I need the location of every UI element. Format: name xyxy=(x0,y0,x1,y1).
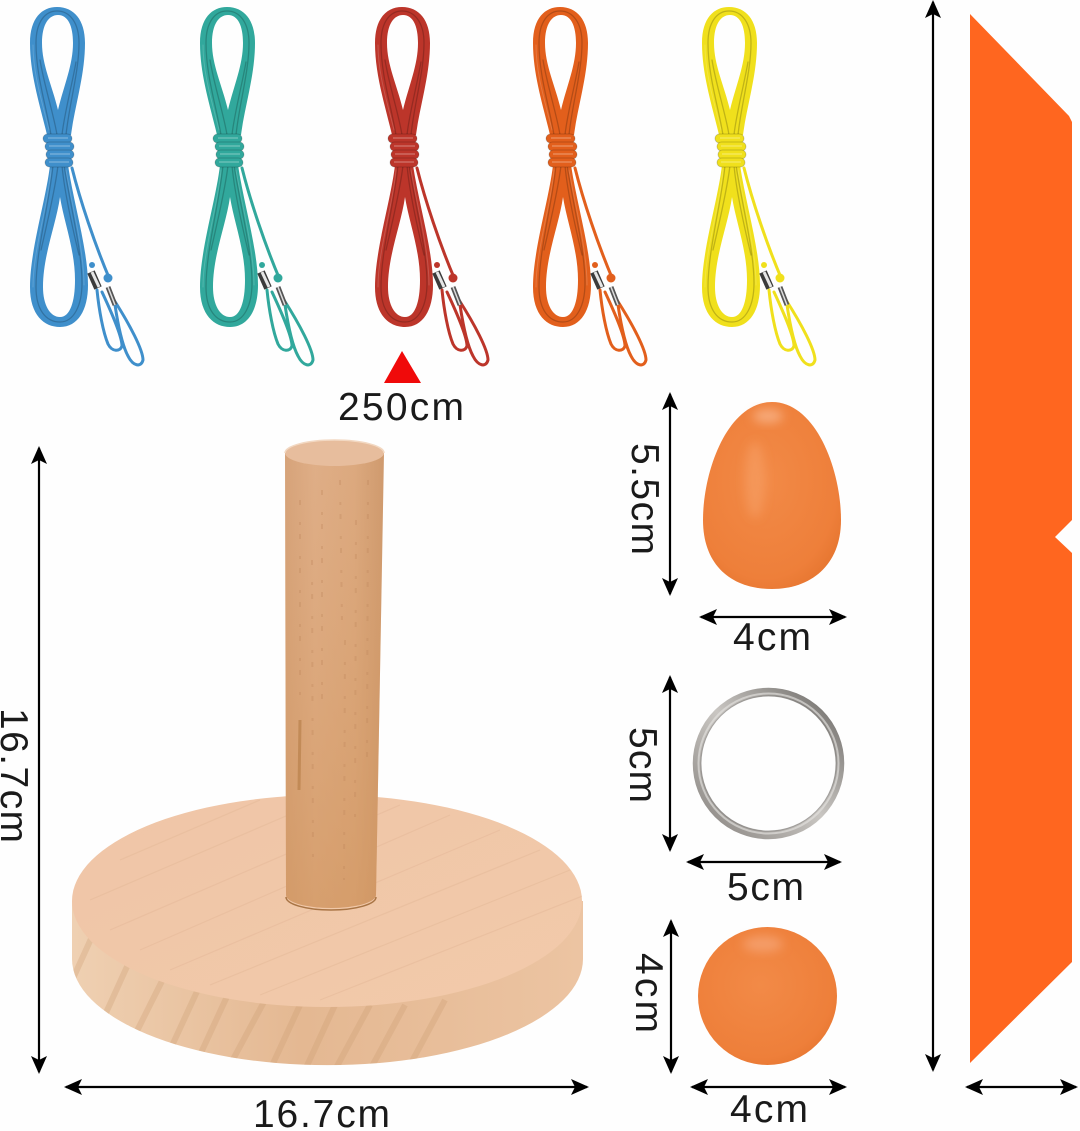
orange paper strip xyxy=(970,14,1072,1063)
arrow: ball width xyxy=(692,1086,845,1088)
arrow: strip height xyxy=(932,2,934,1070)
arrow: strip width xyxy=(967,1086,1076,1088)
ball xyxy=(698,927,837,1065)
icon: red triangle marker xyxy=(384,351,421,383)
arrow: ring width xyxy=(688,861,840,863)
egg height label: 5.5cm xyxy=(623,443,666,555)
egg xyxy=(703,402,841,589)
stand post xyxy=(285,440,384,910)
arrow: stand width xyxy=(66,1086,587,1088)
metal ring xyxy=(697,692,840,835)
ball width label: 4cm xyxy=(730,1088,808,1131)
ball height label: 4cm xyxy=(627,953,670,1033)
arrow: ball height xyxy=(670,921,672,1072)
arrow: egg width xyxy=(701,616,845,618)
arrow: stand height xyxy=(38,448,40,1072)
rope: blue xyxy=(30,7,143,365)
ring height label: 5cm xyxy=(621,727,664,803)
arrow: egg height xyxy=(669,394,671,594)
egg width label: 4cm xyxy=(733,616,811,659)
rope: yellow xyxy=(702,7,815,365)
stand base top xyxy=(72,795,585,1007)
rope: orange xyxy=(533,7,646,365)
stand base side xyxy=(70,901,583,1070)
wooden stand xyxy=(70,440,585,1070)
ring width label: 5cm xyxy=(727,866,804,909)
rope: teal xyxy=(200,7,313,365)
arrow: ring height xyxy=(669,677,671,850)
rope: red xyxy=(375,7,488,365)
rope length label: 250cm xyxy=(338,386,464,429)
